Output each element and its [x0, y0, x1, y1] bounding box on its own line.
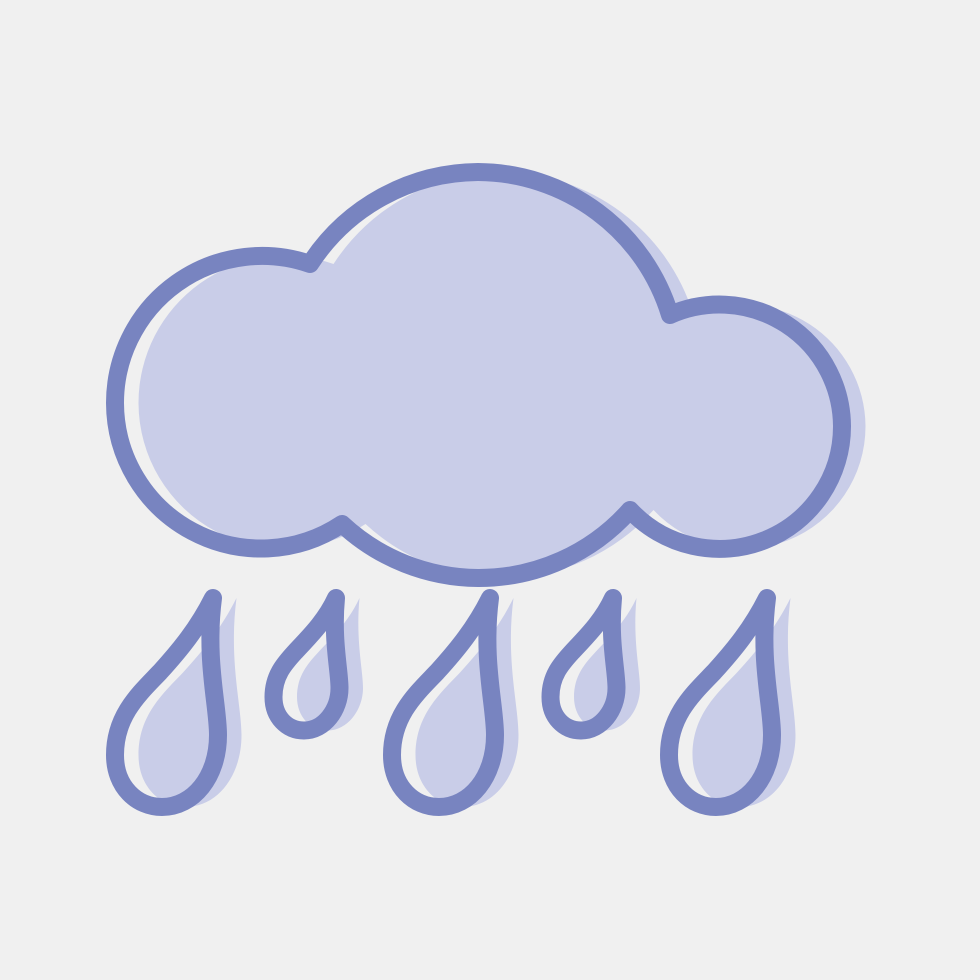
- icon: large rain drop 3: [669, 598, 796, 807]
- icon: small rain drop 1: [274, 598, 363, 730]
- icon: large rain drop 2: [392, 598, 518, 807]
- icon: large rain drop 1: [115, 598, 242, 807]
- icon: cloud: [115, 172, 866, 578]
- icon: small rain drop 2: [550, 598, 640, 730]
